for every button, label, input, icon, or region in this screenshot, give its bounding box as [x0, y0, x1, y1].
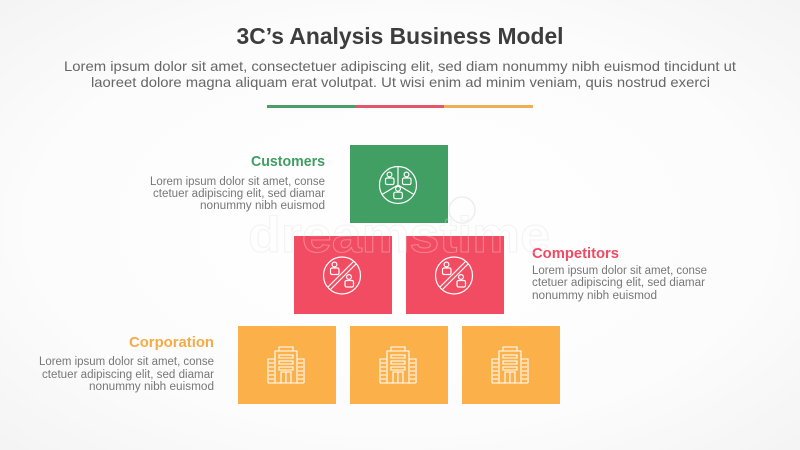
panel: corporation block middle [350, 326, 448, 404]
panel: competitors label [532, 245, 707, 302]
panel: competitors block left [294, 236, 392, 314]
text block: competitors: Lorem ipsum dolor sit amet, conse [532, 265, 707, 277]
icon: building [268, 347, 304, 383]
text block: customers: Lorem ipsum dolor sit amet, conse [150, 176, 325, 188]
text: dreamstime [248, 207, 550, 263]
text block: corporation [39, 356, 214, 393]
text block: customers: ctetuer adipiscing elit, sed diamar [153, 188, 325, 200]
subtitle text: Lorem ipsum dolor sit amet, consectetuer adipiscing elit, sed diam nonummy nibh euismod tincidunt ut [64, 58, 736, 74]
icon: building [492, 347, 528, 383]
text block: corporation: Lorem ipsum dolor sit amet, conse [39, 356, 214, 368]
heading: competitors: Competitors [532, 245, 619, 262]
heading: customers: Customers [251, 153, 325, 170]
panel: corporation label [39, 334, 214, 393]
panel: corporation block right [462, 326, 560, 404]
icon: no competitors [436, 257, 472, 294]
text block: corporation: ctetuer adipiscing elit, sed diamar [42, 369, 214, 381]
text block: competitors [532, 265, 707, 302]
title: 3C’s Analysis Business Model [236, 23, 564, 49]
subtitle text: laoreet dolore magna aliquam erat volutpat. Ut wisi enim ad minim veniam, quis nostrud exerci [91, 74, 710, 90]
heading: corporation: Corporation [129, 334, 214, 351]
text block: competitors: ctetuer adipiscing elit, sed diamar [532, 277, 705, 289]
panel: corporation block left [238, 326, 336, 404]
icon: no competitors [324, 257, 360, 294]
text block: competitors: nonummy nibh euismod [532, 290, 657, 302]
tri-colour divider bar [267, 105, 533, 108]
panel: customers block [350, 145, 448, 223]
icon: building [380, 347, 416, 383]
text: dreamstime [248, 207, 550, 263]
text block: customers [150, 176, 325, 212]
subtitle text [64, 58, 736, 90]
text block: customers: nonummy nibh euismod [200, 200, 325, 212]
panel: competitors block right [406, 236, 504, 314]
icon: customer segments [380, 166, 416, 204]
text block: corporation: nonummy nibh euismod [89, 381, 214, 393]
panel: customers label [150, 153, 325, 212]
